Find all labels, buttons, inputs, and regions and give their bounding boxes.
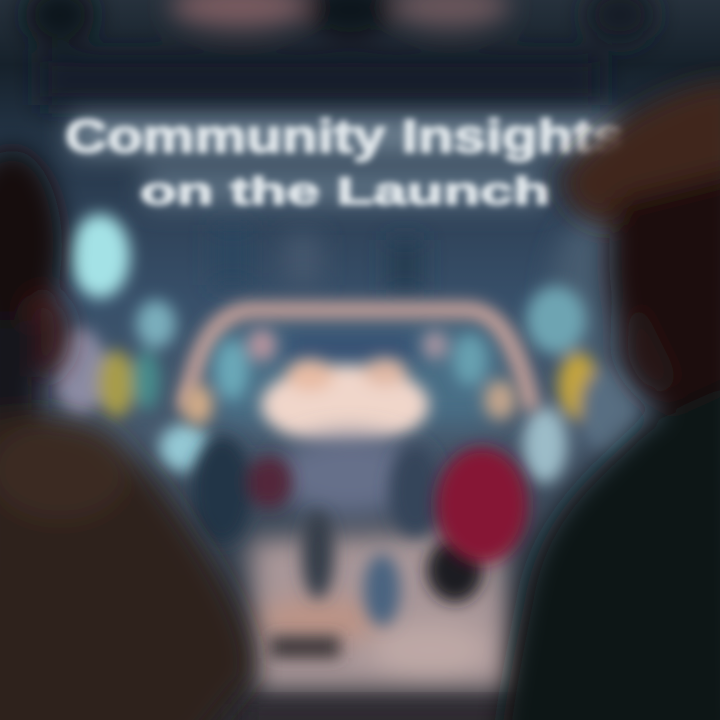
glowing side lights bbox=[54, 214, 640, 483]
stage colored details bbox=[183, 329, 516, 425]
bottom shadow bbox=[240, 704, 540, 720]
title bbox=[65, 110, 625, 213]
pale lower-left object bbox=[82, 638, 154, 706]
dim wall panels bbox=[215, 210, 650, 390]
title glow bbox=[70, 115, 620, 206]
central bright glow bbox=[261, 358, 429, 445]
stage floor bbox=[250, 435, 515, 690]
top ceiling decoration bbox=[25, 0, 655, 105]
central stage interior bbox=[205, 325, 505, 425]
title: on the Launch bbox=[140, 171, 550, 213]
red balloon bbox=[436, 447, 528, 563]
crowd figures bbox=[192, 436, 483, 658]
stage arch bbox=[185, 310, 532, 410]
title: Community Insights bbox=[65, 110, 625, 162]
foreground person left bbox=[0, 150, 252, 720]
foreground person right bbox=[500, 80, 720, 720]
